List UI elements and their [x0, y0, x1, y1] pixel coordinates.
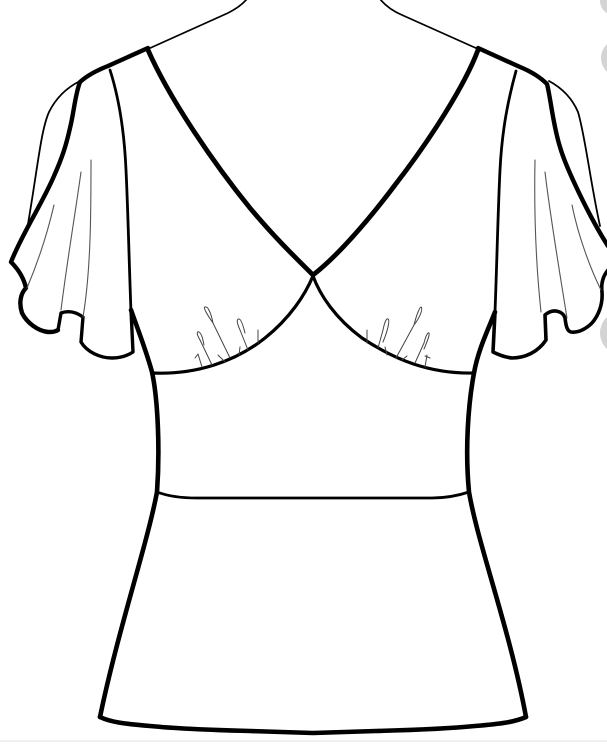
right sleeve — [478, 48, 607, 358]
side seams and waist — [100, 310, 526, 717]
neck and shoulder outline — [148, 0, 478, 49]
left sleeve seam — [110, 70, 131, 312]
v neckline — [148, 50, 478, 275]
left sleeve — [11, 48, 148, 358]
right sleeve back layer — [549, 81, 600, 226]
waist seam — [157, 492, 469, 498]
left side seam — [100, 310, 158, 717]
gathers left — [195, 307, 258, 367]
right sleeve seam — [495, 71, 516, 312]
left sleeve thick edge — [11, 48, 148, 332]
right sleeve thick edge — [478, 48, 607, 246]
left sleeve lower hem — [58, 310, 133, 358]
bottom divider — [0, 740, 607, 742]
right sleeve folds — [535, 160, 601, 318]
right sleeve lower hem — [493, 270, 607, 358]
underbust seam — [152, 276, 474, 373]
left sleeve folds — [27, 160, 91, 317]
screen edge shadows — [600, 0, 607, 355]
gathers right — [367, 307, 430, 367]
left sleeve back layer — [28, 81, 80, 224]
right side seam — [467, 312, 526, 717]
hem — [100, 717, 526, 733]
